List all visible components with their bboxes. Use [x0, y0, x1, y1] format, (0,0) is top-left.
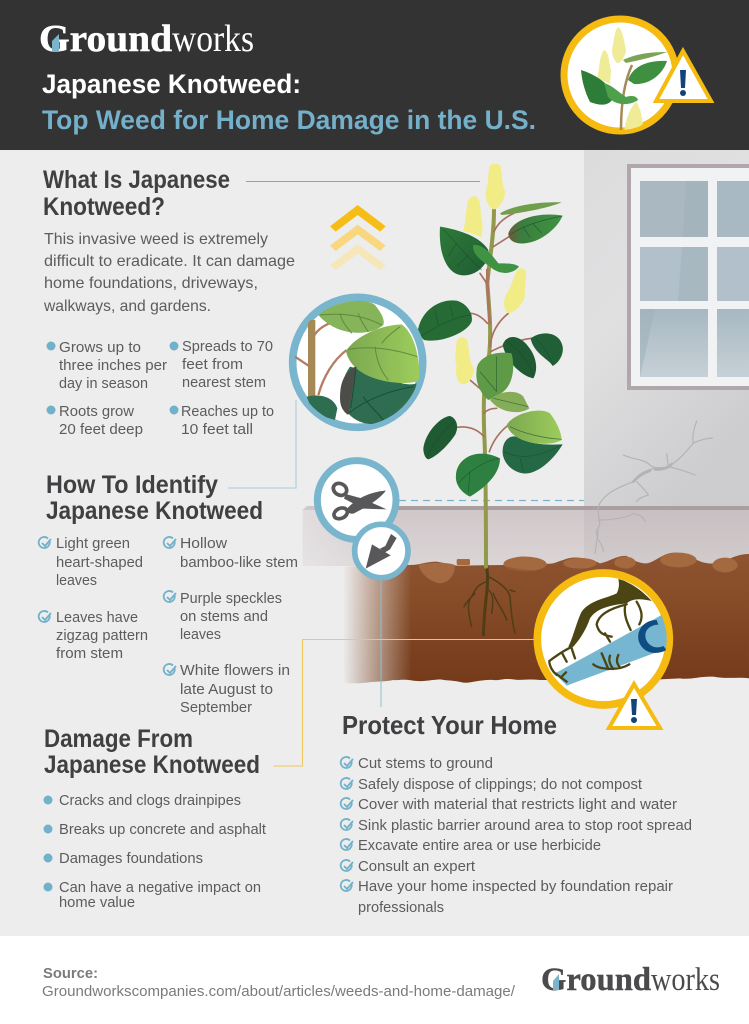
fact: height: 10 feet tall [181, 422, 253, 438]
damage: home value [44, 880, 261, 911]
section: protect your home [341, 710, 692, 916]
check: hollow stem: Hollow [180, 536, 228, 552]
fact: growth rate: Grows up to [59, 340, 141, 356]
heading: How To Identify [46, 471, 218, 499]
scissors icon circle [317, 461, 396, 539]
step: expert: Consult an expert [358, 859, 475, 875]
check: heart-shaped leaves [39, 536, 143, 589]
foundation and soil layer [303, 421, 749, 687]
soil [337, 553, 749, 687]
warning triangle: roots [609, 684, 660, 728]
check: purple speckles: Purple speckles [180, 591, 282, 607]
plant illustration [417, 164, 563, 567]
header plant badge [564, 19, 711, 132]
check: white flowers: late August to [180, 682, 273, 698]
intro paragraph [43, 231, 295, 315]
flowers [455, 164, 526, 384]
check: heart-shaped leaves: Light green [56, 536, 130, 552]
heading: Knotweed? [43, 193, 165, 221]
logo: Ground [39, 18, 172, 60]
step: excavate: Excavate entire area or use herbicide [358, 838, 601, 854]
section: how to identify [39, 471, 298, 716]
logo [39, 18, 254, 60]
step: inspection: Have your home inspected by foundation repair [358, 879, 673, 895]
heading: Japanese Knotweed [44, 751, 260, 779]
fact: growth rate: three inches per [59, 358, 167, 374]
step: inspection: professionals [358, 900, 444, 916]
fact: growth rate [46, 340, 167, 392]
stem [457, 210, 532, 567]
plant roots [464, 565, 515, 635]
window [627, 164, 749, 390]
fact: growth rate: day in season [59, 376, 148, 392]
damage: foundations: Damages foundations [59, 851, 203, 867]
footer background [0, 936, 749, 1024]
fact: spread: Spreads to 70 [182, 339, 273, 355]
title: Japanese Knotweed: [42, 69, 301, 99]
chevrons up arrow [330, 205, 386, 270]
heading: Japanese Knotweed [46, 497, 263, 525]
check: heart-shaped leaves: leaves [56, 573, 97, 589]
step: barrier: Sink plastic barrier around area to stop root spread [358, 818, 692, 834]
fact: root depth: 20 feet deep [59, 422, 143, 438]
footer logo: works [651, 962, 720, 998]
check: zigzag pattern: from stem [56, 646, 123, 662]
heading: Protect Your Home [342, 710, 557, 740]
step: inspection [341, 879, 673, 916]
fact: spread: nearest stem [182, 375, 266, 391]
damage: drainpipes: Cracks and clogs drainpipes [59, 793, 241, 809]
title: Top Weed for Home Damage in the U.S. [42, 105, 536, 135]
leaf detail circle [293, 297, 423, 427]
check: white flowers: September [180, 700, 252, 716]
damage: home value: home value [59, 895, 135, 911]
step: dispose: Safely dispose of clippings; do not compost [358, 777, 642, 793]
check: zigzag pattern: zigzag pattern [56, 628, 148, 644]
intro paragraph: This invasive weed is extremely [44, 231, 268, 248]
damage: home value: Can have a negative impact on [59, 880, 261, 896]
check: zigzag pattern [39, 610, 148, 662]
fact: root depth [46, 404, 143, 438]
footer logo [541, 962, 720, 998]
intro paragraph: walkways, and gardens. [43, 298, 211, 315]
house wall [584, 150, 749, 510]
fact: spread: feet from [182, 357, 243, 373]
section: damage [44, 725, 266, 911]
connector line to damage heading [274, 640, 535, 766]
check: white flowers [164, 663, 290, 716]
check: purple speckles [164, 591, 282, 643]
source note: Groundworkscompanies.com/about/articles/weeds-and-home-damage/ [42, 983, 516, 1000]
fact: height [170, 404, 274, 438]
fact: height: Reaches up to [181, 404, 274, 420]
root and pipe detail circle [537, 573, 672, 705]
source note [42, 965, 516, 1000]
check: purple speckles: leaves [180, 627, 221, 643]
damage: concrete: Breaks up concrete and asphalt [59, 822, 266, 838]
title [42, 69, 536, 135]
intro paragraph: difficult to eradicate. It can damage [44, 253, 295, 270]
check: hollow stem [164, 536, 298, 571]
divider beside first heading [246, 180, 480, 182]
leaves [417, 202, 563, 497]
footer logo: Ground [541, 962, 651, 998]
check: white flowers: White flowers in [180, 663, 290, 679]
heading [46, 471, 263, 525]
step: cut stems: Cut stems to ground [358, 756, 493, 772]
fact: spread [170, 339, 273, 391]
heading: Damage From [44, 725, 193, 753]
heading [44, 725, 260, 779]
check: purple speckles: on stems and [180, 609, 268, 625]
logo: works [172, 18, 254, 60]
check: zigzag pattern: Leaves have [56, 610, 138, 626]
check: hollow stem: bamboo-like stem [180, 555, 298, 571]
heading: What Is Japanese [43, 166, 230, 194]
source note: Source: [43, 965, 98, 982]
section: what is japanese knotweed [43, 166, 295, 438]
intro paragraph: home foundations, driveways, [44, 275, 258, 292]
background panel [0, 150, 749, 936]
step: cover: Cover with material that restricts light and water [358, 797, 677, 813]
wall crack [595, 421, 712, 553]
trowel icon circle [355, 524, 408, 578]
dashed guide line [375, 500, 584, 502]
connector line to identify heading [228, 400, 296, 488]
check: heart-shaped leaves: heart-shaped [56, 555, 143, 571]
connector line to protect heading [380, 580, 382, 707]
header band [0, 0, 749, 150]
heading [43, 166, 230, 221]
fact: root depth: Roots grow [59, 404, 135, 420]
foundation wall [303, 506, 749, 566]
